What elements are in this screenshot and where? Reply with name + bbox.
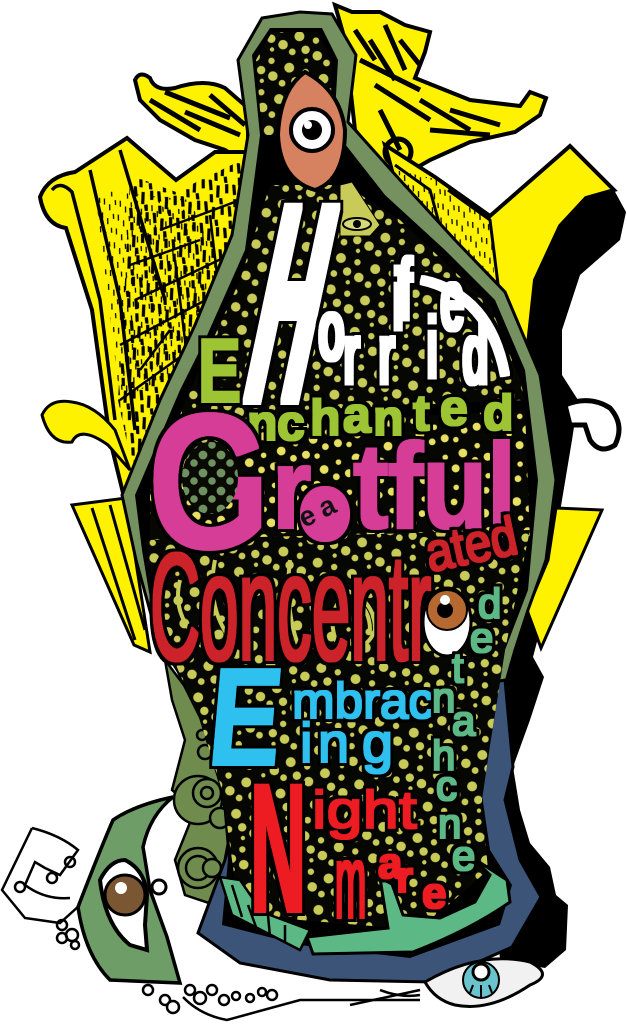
eye: brown right — [423, 588, 471, 656]
word: Concentrated — [150, 506, 522, 694]
crown: top ornament — [135, 5, 546, 180]
lower-left green leaf — [78, 797, 180, 983]
word: Horrified — [227, 146, 505, 463]
top eye on salmon oval — [278, 72, 345, 190]
bottle: blue base — [198, 680, 541, 982]
word: Enchanted: nchanted — [247, 380, 514, 451]
word: Nightmare: m — [335, 822, 366, 941]
word: enchanted vertical: enchanted — [432, 580, 501, 879]
word: Concentrated: ated — [420, 506, 522, 584]
bottle: patterned dots middle yellow — [150, 410, 530, 590]
word: Enchanted: E — [198, 319, 241, 422]
word: Nightmare — [250, 745, 446, 952]
word: Enchanted — [198, 319, 514, 451]
bottle: black interior — [135, 28, 538, 958]
bottle: patterned dots upper — [150, 185, 525, 490]
small word ea in blob: ea — [293, 489, 341, 533]
left green ribs — [220, 877, 310, 950]
word: Embracing: ing — [300, 711, 393, 774]
word: Embracing: mbrac — [292, 672, 434, 729]
word: Embracing — [203, 640, 434, 795]
olive lumps left of bottle — [165, 660, 232, 905]
bottle: green outer rim — [122, 12, 556, 780]
crown: right wing — [385, 145, 614, 345]
big letter H: H — [227, 146, 356, 463]
olive face with small eye — [340, 182, 380, 236]
word: Embracing: E — [203, 640, 289, 795]
chain of bubbles — [143, 985, 420, 1020]
word: Grateful — [148, 375, 515, 590]
word: Grateful: tful — [353, 419, 515, 555]
big letter G with green dot counter: G — [148, 375, 270, 590]
lower-left sketch outline — [2, 828, 80, 949]
letters orrified: orrified — [318, 240, 489, 403]
word: Nightmare: N — [250, 745, 306, 952]
olive swirl lines inside Concentrated — [178, 560, 415, 660]
right scroll — [565, 401, 619, 449]
crown: left lower panel and scroll — [42, 401, 150, 652]
green dots in G counter — [182, 442, 238, 514]
word: Nightmare: ight — [312, 780, 417, 840]
green base band — [307, 858, 510, 954]
word: Nightmare: are — [378, 839, 446, 918]
word: Concentrated: Concentr — [150, 522, 431, 694]
thin lines under bottle — [350, 895, 552, 1005]
crown: right lower panel — [527, 508, 602, 648]
word: Grateful: r — [272, 424, 311, 552]
bottom right eye — [425, 959, 542, 1006]
bottle: patterned dots lower — [145, 530, 530, 930]
black shadow right of crown and bottle — [480, 190, 626, 968]
crown: left wing — [40, 138, 252, 505]
bottle: neck dots — [256, 32, 332, 135]
